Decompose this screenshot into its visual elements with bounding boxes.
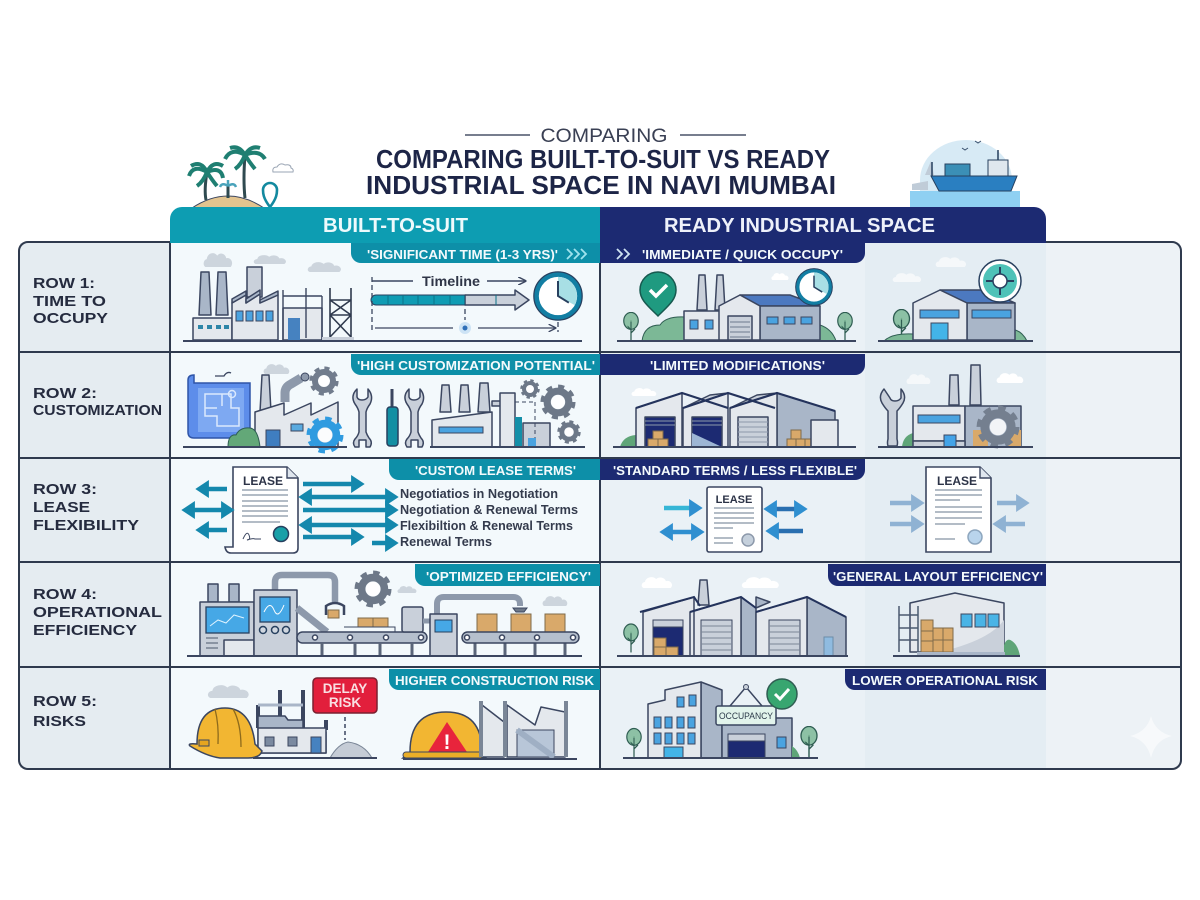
panel: row 5 ready space <box>623 669 1046 758</box>
title line 1: COMPARING BUILT-TO-SUIT VS READY <box>376 144 830 174</box>
row label 3: LEASE <box>33 499 90 516</box>
panel: row 3 built-to-suit <box>194 459 600 553</box>
row label 4: ROW 4: <box>33 586 97 603</box>
sign: delay risk: DELAY <box>323 681 367 696</box>
ribbon: standard terms: 'STANDARD TERMS / LESS FLEXIBLE' <box>613 463 857 478</box>
ribbon: limited modifications: 'LIMITED MODIFICATIONS' <box>650 358 825 373</box>
eyebrow: comparing: COMPARING <box>540 126 668 147</box>
row label 5: ROW 5: <box>33 693 97 710</box>
panel: row 5 built-to-suit <box>189 669 600 759</box>
illustration: factory under construction <box>183 253 582 341</box>
illustration: unfinished shed <box>403 701 577 759</box>
illustration: occupied building <box>623 682 818 758</box>
text: lease terms list: Flexibiltion & Renewal Terms <box>400 519 573 533</box>
icon: hard hat with warning <box>403 712 486 758</box>
icon: hard hat with warning: ! <box>444 731 450 754</box>
illustration: general warehouse <box>617 577 848 656</box>
row label 1: TIME TO <box>33 293 106 310</box>
row label 3: FLEXIBILITY <box>33 517 139 534</box>
ribbon: custom lease terms: 'CUSTOM LEASE TERMS' <box>415 463 576 478</box>
ribbon: significant time: 'SIGNIFICANT TIME (1-3 YRS)' <box>367 247 558 262</box>
ribbon: general layout efficiency <box>828 564 1046 586</box>
row label 4: EFFICIENCY <box>33 622 137 639</box>
header: built-to-suit: BUILT-TO-SUIT <box>323 215 468 237</box>
row label 5: RISKS <box>33 713 86 730</box>
illustration: custom plant and gears <box>430 380 585 447</box>
title line 2: INDUSTRIAL SPACE IN NAVI MUMBAI <box>366 170 836 200</box>
ribbon: lower operational risk: LOWER OPERATIONAL RISK <box>852 673 1039 688</box>
icon: hard hat <box>189 708 262 758</box>
illustration: ready factory with clock <box>617 269 856 341</box>
ribbon: general layout efficiency: 'GENERAL LAYOUT EFFICIENCY' <box>833 569 1043 584</box>
ribbon: high customization potential: 'HIGH CUSTOMIZATION POTENTIAL' <box>357 358 595 373</box>
illustration: automated production line <box>187 573 582 656</box>
text: lease terms list: Renewal Terms <box>400 535 492 549</box>
ribbon: lower operational risk <box>845 669 1046 690</box>
arrows: negotiation flows <box>194 484 386 543</box>
icon: port ship <box>910 140 1020 207</box>
row label 2: ROW 2: <box>33 385 97 402</box>
icon: sparkle watermark <box>1130 716 1172 758</box>
row labels column <box>33 275 162 730</box>
text: lease terms list: Negotiatios in Negotiation <box>400 487 558 501</box>
panel: row 2 built-to-suit <box>183 354 600 451</box>
row label 4: OPERATIONAL <box>33 604 162 621</box>
row label 5 <box>33 693 97 730</box>
illustration: small warehouse with stock <box>893 593 1020 656</box>
icon: palm island <box>189 147 293 208</box>
ribbon: higher construction risk <box>389 669 600 690</box>
text: lease terms list <box>400 487 578 549</box>
row label 1 <box>33 275 108 327</box>
illustration: stalled construction <box>208 685 377 758</box>
panel: row 3 ready space <box>600 459 1025 552</box>
header: ready industrial space <box>600 207 1046 243</box>
row label 4 <box>33 586 162 639</box>
icon: lease document: LEASE <box>243 474 283 488</box>
icon: clock <box>534 272 582 320</box>
ribbon: immediate quick occupy: 'IMMEDIATE / QUICK OCCUPY' <box>642 247 843 262</box>
row label 1: ROW 1: <box>33 275 95 292</box>
ribbon: significant time <box>351 243 600 263</box>
ribbon: limited modifications <box>600 354 865 375</box>
ribbon: standard terms <box>600 459 865 480</box>
row label 3: ROW 3: <box>33 481 97 498</box>
title block <box>366 126 836 200</box>
sign: delay risk: RISK <box>329 695 361 710</box>
row label 3 <box>33 481 139 534</box>
icon: lease document <box>225 467 298 553</box>
header: column titles <box>170 207 1046 243</box>
icon: standard lease document: LEASE <box>716 494 752 506</box>
panel: row 2 ready space <box>600 354 1033 447</box>
icon: green check <box>767 679 797 709</box>
row label 2: CUSTOMIZATION <box>33 402 162 419</box>
chart: timeline arrow: Timeline <box>422 274 481 289</box>
icon: standard lease document <box>707 487 762 552</box>
panel: row 1 ready space <box>600 243 1033 341</box>
icon: second lease document: LEASE <box>937 474 977 488</box>
ribbon: higher construction risk: HIGHER CONSTRUCTION RISK <box>395 673 595 688</box>
ribbon: immediate quick occupy <box>600 243 865 263</box>
row label 1: OCCUPY <box>33 310 108 327</box>
panel: row 4 ready space <box>617 564 1046 656</box>
arrows: standard lease <box>664 508 803 532</box>
header: ready industrial space: READY INDUSTRIAL SPACE <box>664 215 935 237</box>
illustration: factory with wrench <box>878 365 1033 447</box>
illustration: ready building with timer <box>878 257 1033 341</box>
sign: occupancy <box>716 706 776 725</box>
panel: table background <box>19 242 1181 769</box>
panel: row 4 built-to-suit <box>187 564 600 656</box>
ribbon: optimized efficiency: 'OPTIMIZED EFFICIENCY' <box>426 569 591 584</box>
text: lease terms list: Negotiation & Renewal Terms <box>400 503 578 517</box>
icon: tools <box>353 389 424 447</box>
ribbon: high customization potential <box>351 354 600 375</box>
header: built-to-suit <box>170 207 600 243</box>
illustration: warehouse row <box>613 388 856 447</box>
illustration: blueprint and factory <box>183 364 347 451</box>
ribbon: custom lease terms <box>389 459 600 480</box>
row label 2 <box>33 385 162 419</box>
sign: delay risk <box>313 678 377 713</box>
arrows: second lease <box>890 503 1025 524</box>
icon: second lease document <box>926 467 991 552</box>
panel: row 1 built-to-suit <box>183 243 600 341</box>
ribbon: optimized efficiency <box>415 564 600 586</box>
chart: timeline arrow <box>371 274 558 334</box>
sign: occupancy: OCCUPANCY <box>719 711 773 721</box>
